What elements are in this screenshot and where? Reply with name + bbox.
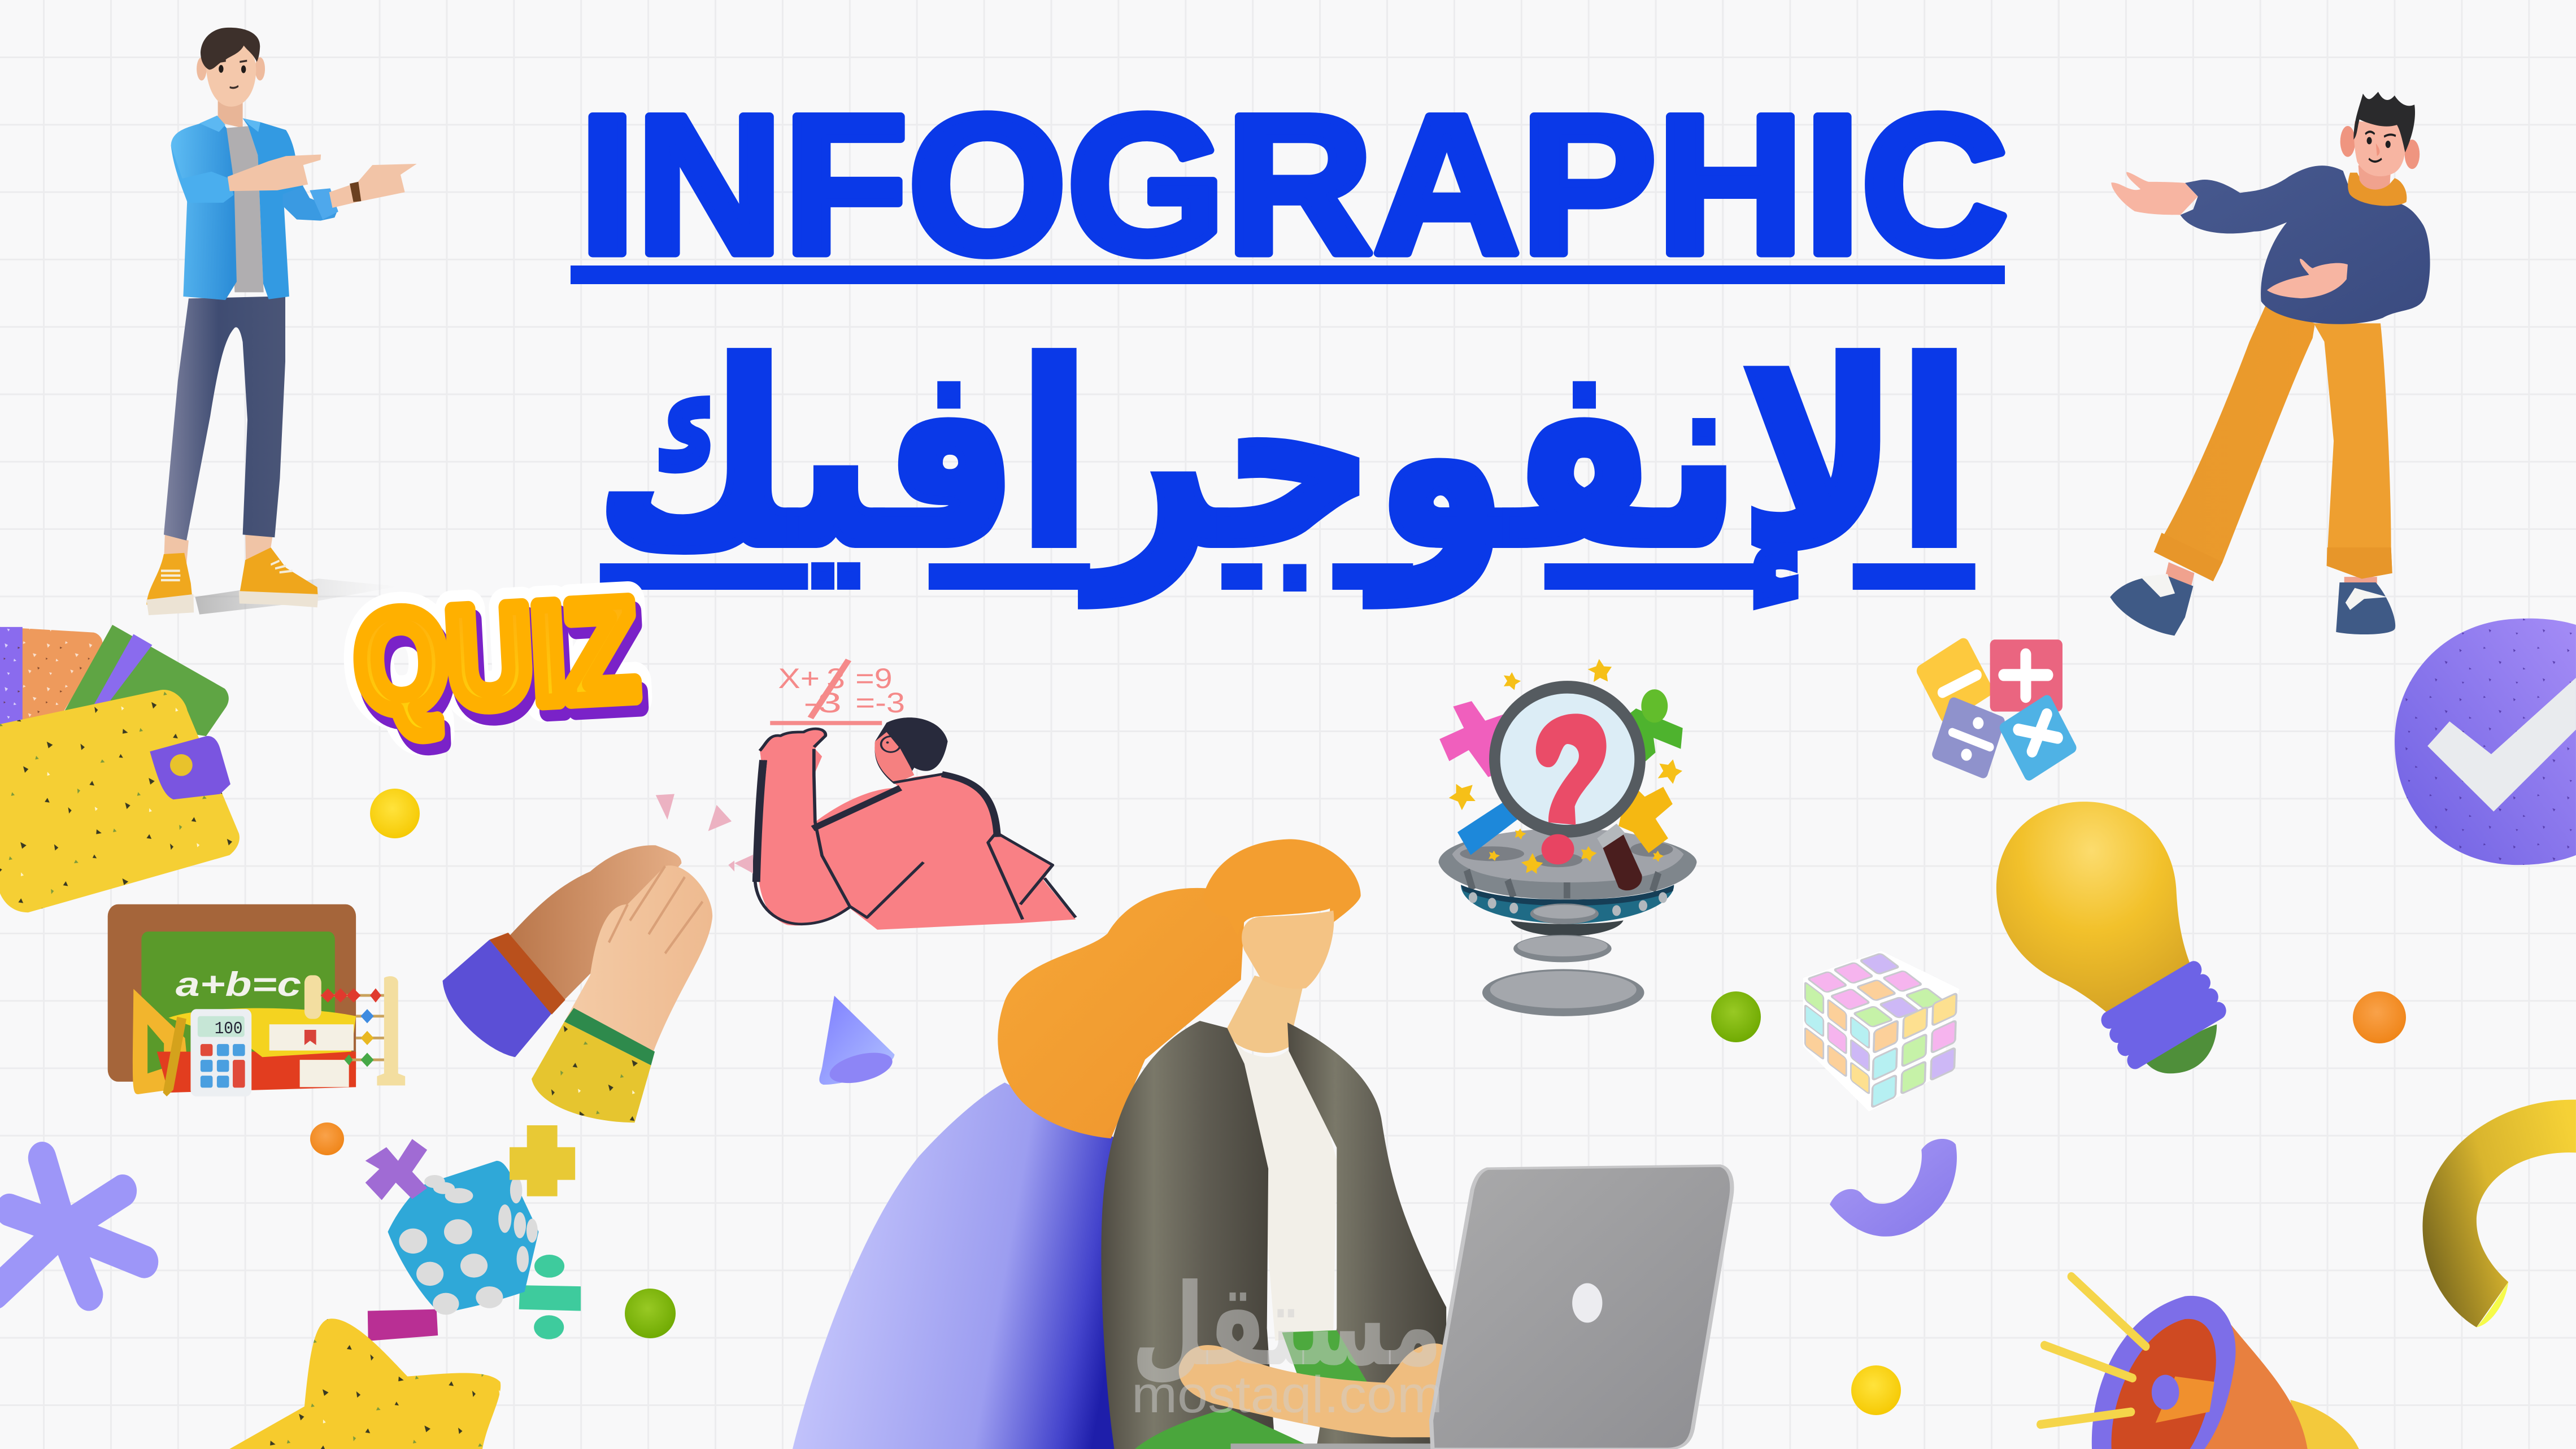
wallet icon	[0, 625, 240, 912]
Arabic title: الإنفوجرافيك	[595, 310, 1970, 606]
character: man in navy sweater presenting	[2110, 92, 2430, 636]
math writer illustration: -3	[803, 687, 842, 719]
yellow speckled star	[229, 1319, 501, 1449]
yellow ball, bottom	[1851, 1365, 1901, 1415]
green ball, lower left	[625, 1289, 676, 1338]
watermark: مستقل mostaql.com	[1131, 1260, 1443, 1424]
math operator cards	[1914, 636, 2078, 782]
megaphone icon	[2040, 1277, 2359, 1449]
math writer illustration: =-3	[855, 687, 905, 719]
math writer illustration	[755, 660, 1076, 930]
magnifying glass with question mark on a flying saucer	[1438, 659, 1697, 1016]
clapping hands icon	[442, 845, 712, 1122]
second confetti cone	[734, 855, 753, 873]
check mark badge	[2395, 619, 2576, 865]
rubik's cube icon	[1803, 951, 1960, 1112]
woman working on laptop	[793, 839, 1732, 1449]
blackboard with books, calculator and abacus: a+b=c	[176, 965, 301, 1003]
math writer illustration: 3	[826, 663, 845, 694]
purple asterisk	[0, 1158, 144, 1295]
watermark: مستقل mostaql.com: مستقل	[1131, 1260, 1443, 1391]
dice with math symbols	[365, 1125, 581, 1341]
golden ball	[370, 789, 420, 838]
confetti cones beside the hands	[656, 794, 734, 872]
purple cone	[819, 996, 901, 1089]
title underline	[571, 266, 2005, 284]
purple macaroni shape	[1830, 1139, 1957, 1237]
blackboard with books, calculator and abacus: 100	[215, 1019, 242, 1038]
math writer illustration: X+	[778, 663, 820, 694]
lightbulb icon	[1996, 802, 2218, 1073]
character: man in blue shirt pointing	[146, 28, 417, 615]
orange ball, left	[310, 1122, 344, 1155]
math writer illustration: =9	[855, 663, 893, 694]
QUIZ badge: QUIZ	[351, 571, 641, 742]
blackboard with books, calculator and abacus	[108, 904, 405, 1096]
orange ball, right	[2353, 991, 2406, 1043]
title: INFOGRAPHIC: INFOGRAPHIC	[579, 74, 2008, 295]
Arabic title underline segments	[600, 563, 1975, 590]
green ball, centre right	[1711, 991, 1761, 1042]
QUIZ badge: QUIZ	[356, 580, 646, 751]
watermark: مستقل mostaql.com: mostaql.com	[1132, 1366, 1443, 1424]
yellow ring segment	[2422, 1100, 2576, 1328]
QUIZ badge: QUIZ	[351, 571, 641, 742]
